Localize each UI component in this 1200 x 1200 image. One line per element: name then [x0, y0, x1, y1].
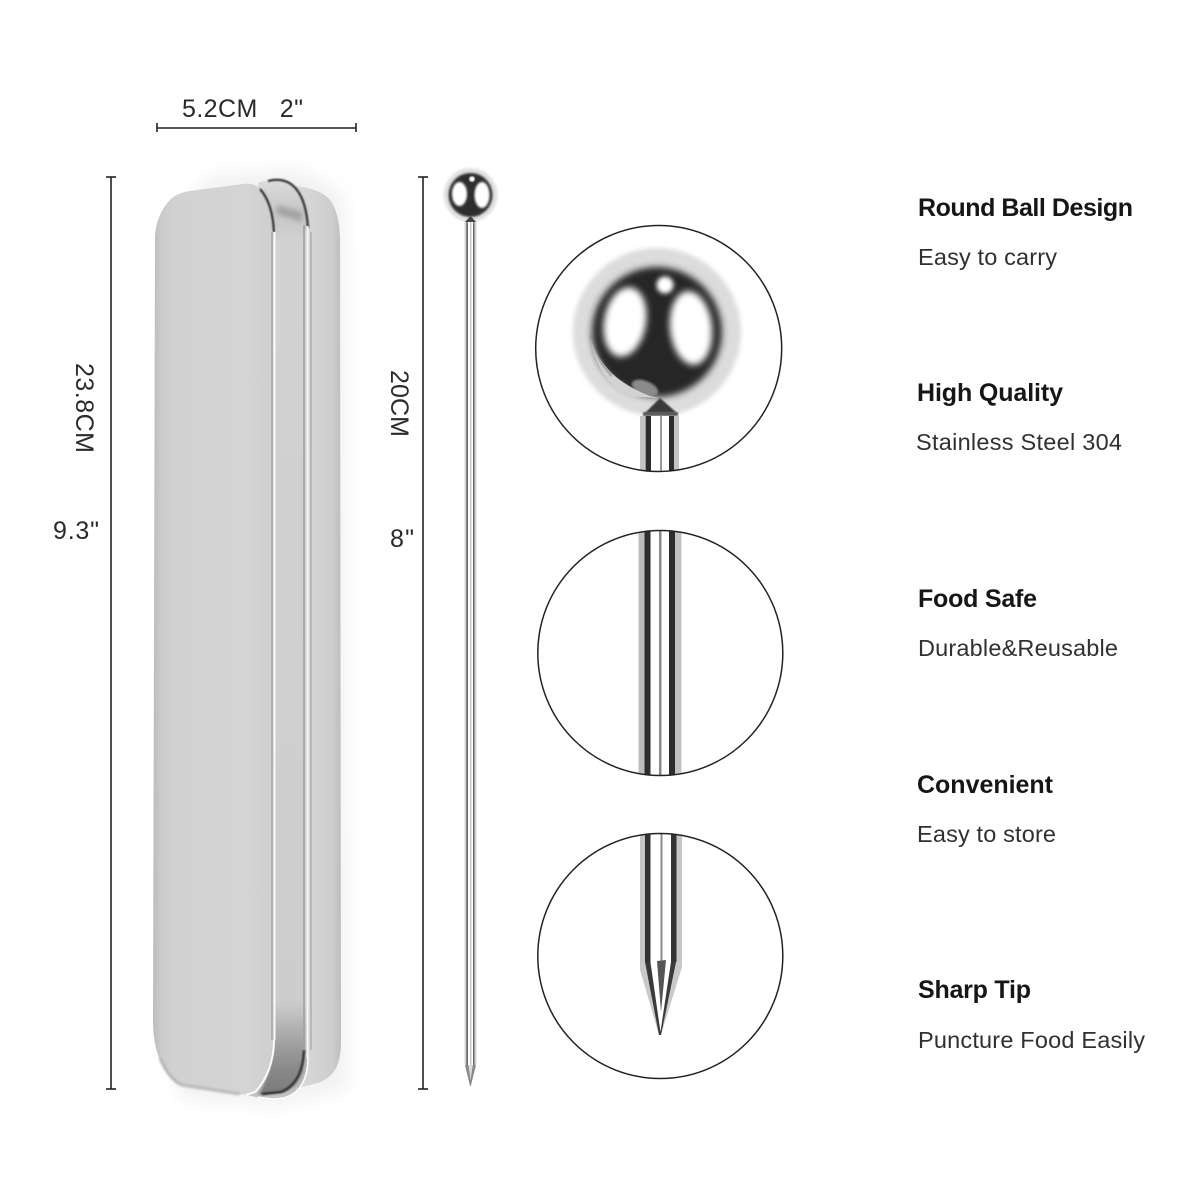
feature: high quality: High Quality — [917, 379, 1063, 407]
feature: sharp tip — [918, 976, 1145, 1053]
ball neck cone — [645, 398, 677, 413]
feature: convenient — [917, 771, 1056, 847]
shaft — [645, 416, 669, 418]
dimension: case height: 23.8CM — [70, 363, 98, 453]
left highlight — [598, 284, 652, 360]
dimension: pick length: 8" — [390, 525, 414, 553]
dimension: case height — [53, 177, 116, 1089]
feature: food safe: Durable&Reusable — [918, 635, 1118, 661]
cocktail pick — [444, 168, 498, 1086]
feature: high quality: Stainless Steel 304 — [916, 429, 1122, 455]
ball dark body — [592, 267, 722, 397]
dimension: pick length — [385, 177, 428, 1089]
right highlight — [666, 289, 716, 367]
feature: round ball design — [918, 194, 1133, 270]
dimension: case width: 5.2CM 2" — [182, 95, 303, 123]
metal storage case — [153, 168, 348, 1106]
pick shaft — [464, 220, 476, 1086]
ball halo — [573, 248, 741, 416]
tip cone — [640, 962, 682, 1035]
pick ball — [444, 168, 498, 222]
feature: high quality — [916, 379, 1122, 455]
case back panel — [296, 186, 341, 1088]
feature: convenient: Easy to store — [917, 821, 1056, 847]
feature: food safe — [918, 585, 1118, 661]
feature: round ball design: Easy to carry — [918, 244, 1057, 270]
dimension: pick length: 20CM — [385, 370, 413, 437]
feature: sharp tip: Sharp Tip — [918, 976, 1031, 1004]
top highlight — [656, 276, 674, 294]
detail circle: sharp tip — [538, 832, 783, 1078]
feature: food safe: Food Safe — [918, 585, 1037, 613]
case lid — [153, 184, 273, 1095]
dimension: case height: 9.3" — [53, 517, 99, 545]
feature: convenient: Convenient — [917, 771, 1054, 799]
feature: sharp tip: Puncture Food Easily — [918, 1027, 1145, 1053]
detail circle: shaft — [538, 528, 783, 778]
feature: round ball design: Round Ball Design — [918, 194, 1133, 222]
case middle band — [247, 179, 308, 1099]
detail circle: round ball — [536, 226, 782, 474]
